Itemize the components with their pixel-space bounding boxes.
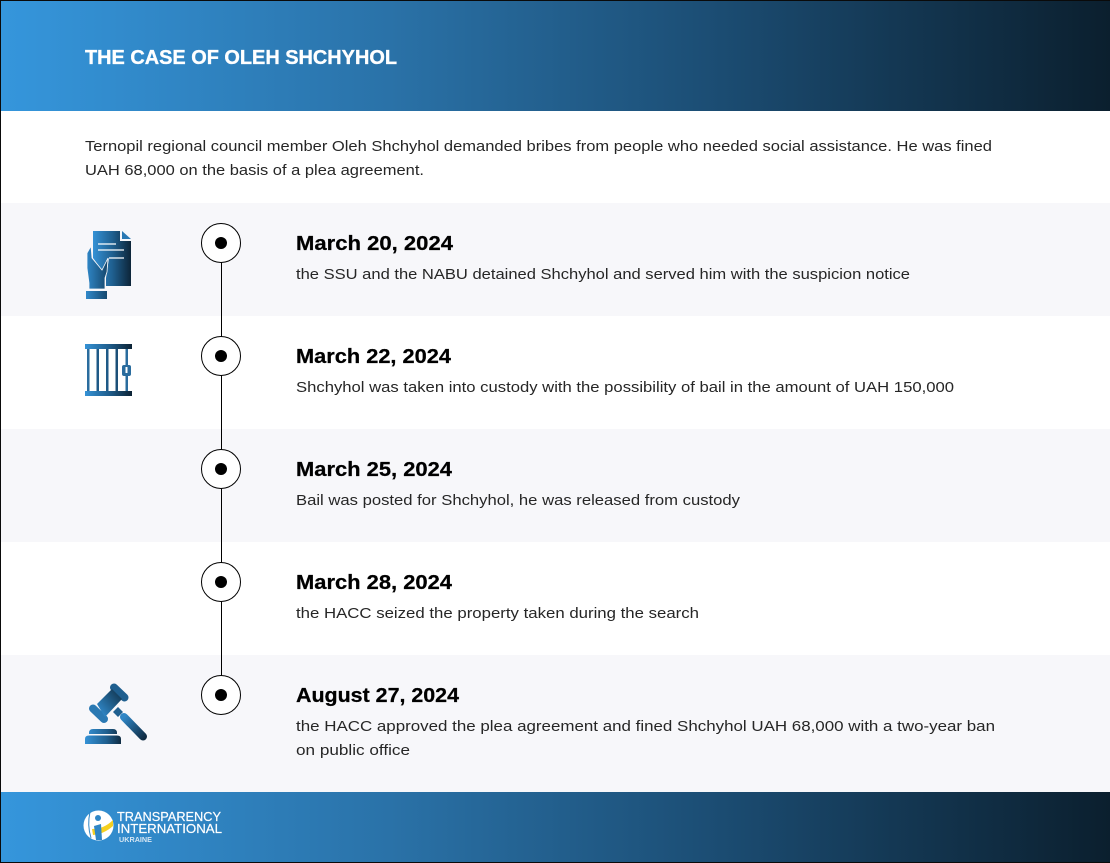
marker [202,224,240,262]
date: March 25, 2024 [296,459,453,481]
timeline entry: August 27, 2024 [202,676,995,759]
description: the HACC seized the property taken during the search [296,605,699,622]
header band [1,1,1110,111]
logo: Transparency International Ukraine: INTERNATIONAL [117,821,222,836]
date: March 20, 2024 [296,233,454,255]
intro text: Ternopil regional council member Oleh Shchyhol demanded bribes from people who needed social assistance. He was fined [85,138,992,155]
icon: judge gavel [85,688,143,744]
logo: Transparency International Ukraine: TRANSPARENCY [117,809,221,824]
timeline entry: March 25, 2024 [202,450,741,509]
intro text: UAH 68,000 on the basis of a plea agreement. [85,162,424,179]
title: THE CASE OF OLEH SHCHYHOL [85,47,397,69]
description: the SSU and the NABU detained Shchyhol and served him with the suspicion notice [296,266,910,283]
logo: Transparency International Ukraine: UKRAINE [119,837,152,844]
intro text [85,138,992,179]
description: Bail was posted for Shchyhol, he was released from custody [296,492,741,509]
timeline entry: March 22, 2024 [202,336,954,396]
icon: hand holding document [86,231,131,299]
icon: jail cell bars [85,344,132,396]
timeline line [221,243,222,695]
timeline entry: March 28, 2024 [202,562,699,622]
description: on public office [296,742,410,759]
date: August 27, 2024 [296,685,460,707]
date: March 28, 2024 [296,572,453,594]
timeline entry: March 20, 2024 [202,224,910,283]
description [296,718,995,759]
row backgrounds [1,203,1110,792]
description: the HACC approved the plea agreement and fined Shchyhol UAH 68,000 with a two-year ban [296,718,995,735]
description: Shchyhol was taken into custody with the possibility of bail in the amount of UAH 150,000 [296,379,954,396]
date: March 22, 2024 [296,346,452,368]
logo: Transparency International Ukraine [84,809,222,844]
marker [202,450,240,488]
marker [202,676,240,714]
marker [202,336,240,376]
marker [202,562,240,602]
footer band [1,792,1110,862]
